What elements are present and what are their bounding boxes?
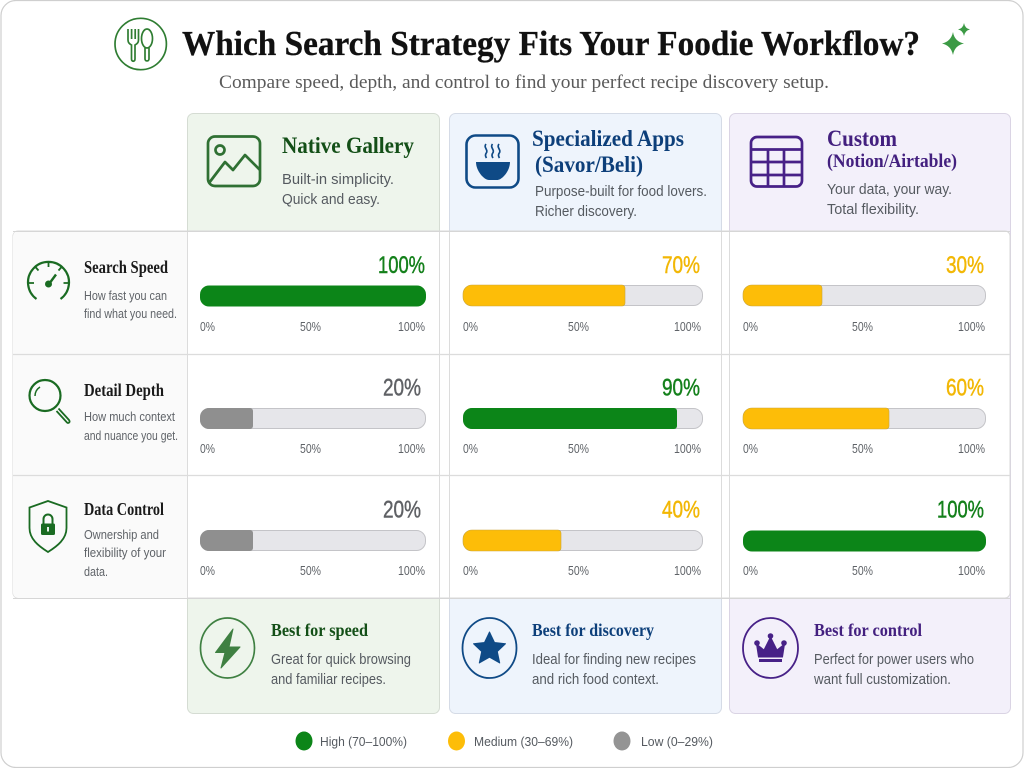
description: Great for quick browsing: [271, 651, 411, 668]
icon: sparkles: [942, 23, 970, 55]
description: and nuance you get.: [84, 428, 178, 443]
heading: [532, 126, 684, 178]
label text: Detail Depth: [84, 380, 164, 400]
icon: magnifier: [30, 380, 70, 423]
legend: High (70–100%): [320, 734, 407, 749]
description: want full customization.: [813, 671, 951, 688]
chart: Native Gallery, Search Speed 100%: 100%: [398, 320, 425, 334]
chart: Specialized Apps, Detail Depth 90%: [463, 374, 702, 456]
description: Quick and easy.: [282, 191, 380, 208]
icon: fork and spoon: [115, 18, 166, 70]
description: [271, 651, 411, 688]
panel: Specialized Apps header: [466, 126, 707, 220]
heading: [827, 126, 957, 172]
description: Your data, your way.: [827, 181, 952, 198]
icon: star: [462, 618, 516, 678]
chart: Custom, Search Speed 30%: 30%: [946, 252, 984, 279]
chart: Specialized Apps, Detail Depth 90%: 90%: [662, 374, 700, 402]
description: [282, 171, 394, 208]
label text: Data Control: [84, 499, 164, 519]
description: [84, 288, 177, 321]
chart: Specialized Apps, Search Speed 70%: [463, 252, 702, 334]
chart: Native Gallery, Search Speed 100%: 50%: [300, 320, 321, 334]
chart: Custom, Detail Depth 60%: [743, 374, 986, 456]
heading: Specialized Apps: [532, 126, 684, 152]
chart: Custom, Detail Depth 60%: 100%: [958, 442, 985, 456]
chart: Custom, Data Control 100%: 100%: [937, 496, 984, 524]
chart: Specialized Apps, Data Control 40%: [463, 496, 702, 578]
chart: Native Gallery, Data Control 20%: [200, 496, 426, 578]
icon: image: [208, 136, 260, 186]
chart: Custom, Detail Depth 60%: 0%: [743, 442, 758, 456]
chart: Native Gallery, Data Control 20%: 50%: [300, 564, 321, 578]
chart: Native Gallery, Data Control 20%: 100%: [398, 564, 425, 578]
row label: Data Control: [30, 499, 167, 579]
panel: Best for discovery: [462, 618, 696, 688]
subtitle: Compare speed, depth, and control to find your perfect recipe discovery setup.: [219, 72, 829, 93]
description: and familiar recipes.: [271, 671, 386, 688]
title: Which Search Strategy Fits Your Foodie Workflow?: [182, 24, 920, 63]
panel: Custom header: [751, 126, 957, 218]
heading: Custom: [827, 126, 897, 152]
icon: table: [751, 137, 802, 186]
legend: Low (0–29%): [641, 734, 713, 749]
row label: Search Speed: [28, 257, 177, 321]
chart: Specialized Apps, Data Control 40%: 0%: [463, 564, 478, 578]
description: Perfect for power users who: [814, 651, 974, 668]
chart: Custom, Search Speed 30%: 50%: [852, 320, 873, 334]
description: flexibility of your: [84, 545, 167, 560]
panel: Best for speed: [200, 618, 411, 688]
description: [84, 527, 167, 579]
chart: Custom, Data Control 100%: 50%: [852, 564, 873, 578]
chart: Native Gallery, Detail Depth 20%: 100%: [398, 442, 425, 456]
chart: Specialized Apps, Detail Depth 90%: 50%: [568, 442, 589, 456]
heading: Best for control: [814, 620, 922, 640]
chart: Native Gallery, Detail Depth 20%: [200, 374, 426, 456]
description: [827, 181, 952, 218]
chart: Native Gallery, Search Speed 100%: 0%: [200, 320, 215, 334]
heading: Best for discovery: [532, 620, 654, 640]
chart: Specialized Apps, Search Speed 70%: 0%: [463, 320, 478, 334]
chart: Specialized Apps, Data Control 40%: 40%: [662, 496, 700, 524]
heading: (Notion/Airtable): [827, 151, 957, 172]
chart: Custom, Search Speed 30%: 100%: [958, 320, 985, 334]
legend: [296, 732, 713, 750]
heading: (Savor/Beli): [535, 152, 643, 178]
description: Purpose-built for food lovers.: [535, 183, 707, 200]
description: How fast you can: [84, 288, 167, 303]
description: Ideal for finding new recipes: [532, 651, 696, 668]
description: Built-in simplicity.: [282, 171, 394, 188]
chart: Custom, Detail Depth 60%: 50%: [852, 442, 873, 456]
chart: Custom, Data Control 100%: [743, 496, 986, 578]
description: find what you need.: [84, 306, 177, 321]
chart: Specialized Apps, Search Speed 70%: 100%: [674, 320, 701, 334]
chart: Native Gallery, Data Control 20%: 0%: [200, 564, 215, 578]
description: Richer discovery.: [535, 203, 637, 220]
legend: Medium (30–69%): [474, 734, 573, 749]
chart: Custom, Data Control 100%: 0%: [743, 564, 758, 578]
chart: Specialized Apps, Detail Depth 90%: 0%: [463, 442, 478, 456]
heading: Native Gallery: [282, 133, 414, 159]
label text: Search Speed: [84, 257, 168, 277]
description: Total flexibility.: [827, 201, 919, 218]
description: and rich food context.: [532, 671, 659, 688]
chart: Specialized Apps, Search Speed 70%: 70%: [662, 252, 700, 279]
panel: Native Gallery header: [208, 133, 414, 208]
icon: shield with lock: [30, 501, 66, 552]
icon: steaming bowl: [466, 136, 518, 188]
description: [84, 409, 178, 443]
chart: Custom, Search Speed 30%: 0%: [743, 320, 758, 334]
chart: Native Gallery, Search Speed 100%: [200, 252, 426, 334]
icon: lightning bolt: [200, 618, 254, 678]
chart: Native Gallery, Detail Depth 20%: 20%: [383, 374, 421, 402]
description: How much context: [84, 409, 175, 424]
icon: crown: [743, 618, 798, 678]
chart: Specialized Apps, Data Control 40%: 100%: [674, 564, 701, 578]
description: [813, 651, 974, 688]
description: [532, 651, 696, 688]
icon: speedometer: [28, 261, 69, 299]
description: [535, 183, 707, 220]
chart: Custom, Search Speed 30%: [743, 252, 986, 334]
panel: comparison grid: [13, 231, 1010, 598]
panel: column backgrounds: [188, 114, 1010, 714]
heading: Best for speed: [271, 620, 368, 640]
row label: Detail Depth: [30, 380, 178, 443]
chart: Native Gallery, Detail Depth 20%: 50%: [300, 442, 321, 456]
chart: Native Gallery, Search Speed 100%: 100%: [378, 252, 425, 279]
chart: Specialized Apps, Data Control 40%: 50%: [568, 564, 589, 578]
chart: Custom, Detail Depth 60%: 60%: [946, 374, 984, 402]
chart: Custom, Data Control 100%: 100%: [958, 564, 985, 578]
description: Ownership and: [84, 527, 159, 542]
chart: Native Gallery, Detail Depth 20%: 0%: [200, 442, 215, 456]
chart: Specialized Apps, Detail Depth 90%: 100%: [674, 442, 701, 456]
chart: Native Gallery, Data Control 20%: 20%: [383, 496, 421, 524]
description: data.: [84, 564, 108, 579]
panel: Best for control: [743, 618, 974, 688]
chart: Specialized Apps, Search Speed 70%: 50%: [568, 320, 589, 334]
